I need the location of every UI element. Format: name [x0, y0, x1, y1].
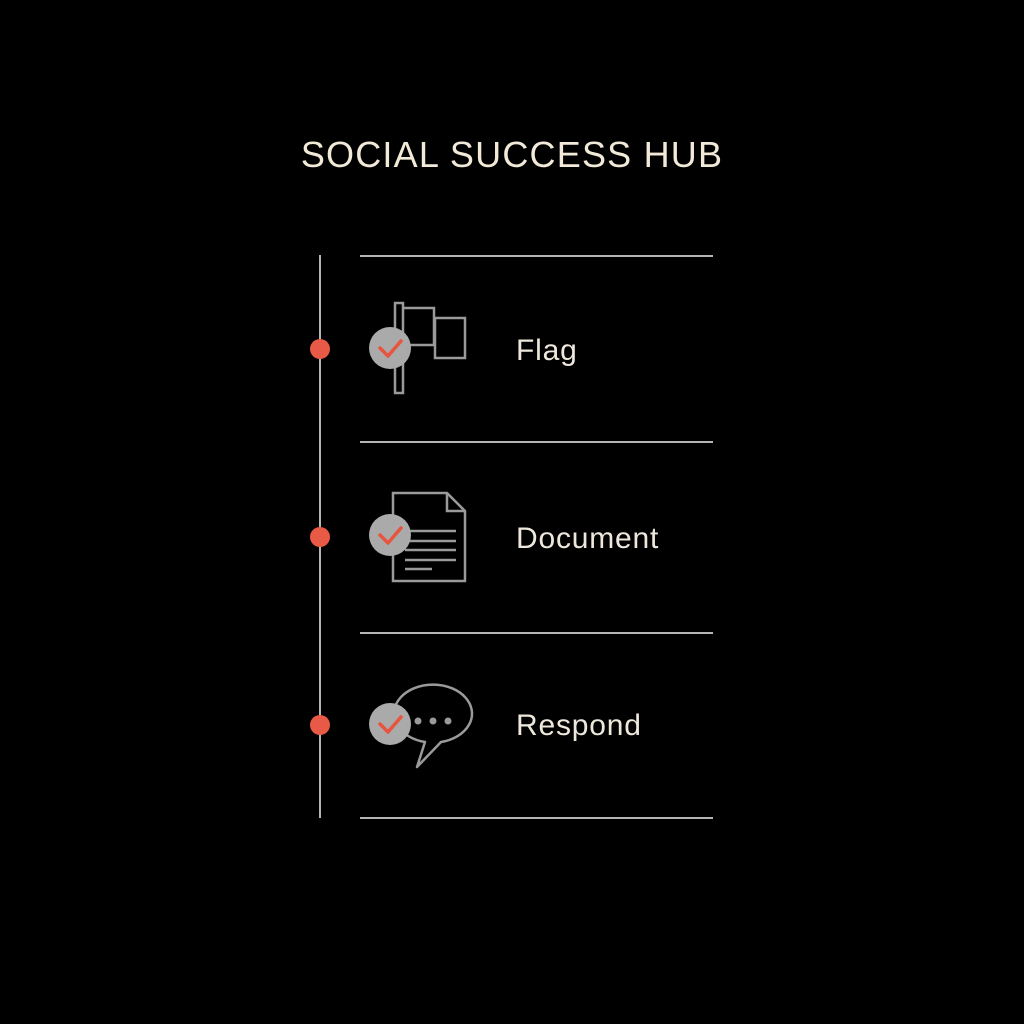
timeline: [310, 255, 330, 818]
label: Document: Document: [516, 522, 659, 555]
label: Respond: Respond: [516, 709, 642, 742]
title: SOCIAL SUCCESS HUB: [301, 134, 723, 175]
step: respond: [369, 685, 642, 767]
icon: flag: [395, 303, 465, 393]
step: flag: [369, 303, 578, 393]
step: document: [369, 493, 659, 581]
icon: document: [393, 493, 465, 581]
icon: speech bubble: [394, 685, 472, 767]
label: Flag: Flag: [516, 334, 578, 367]
